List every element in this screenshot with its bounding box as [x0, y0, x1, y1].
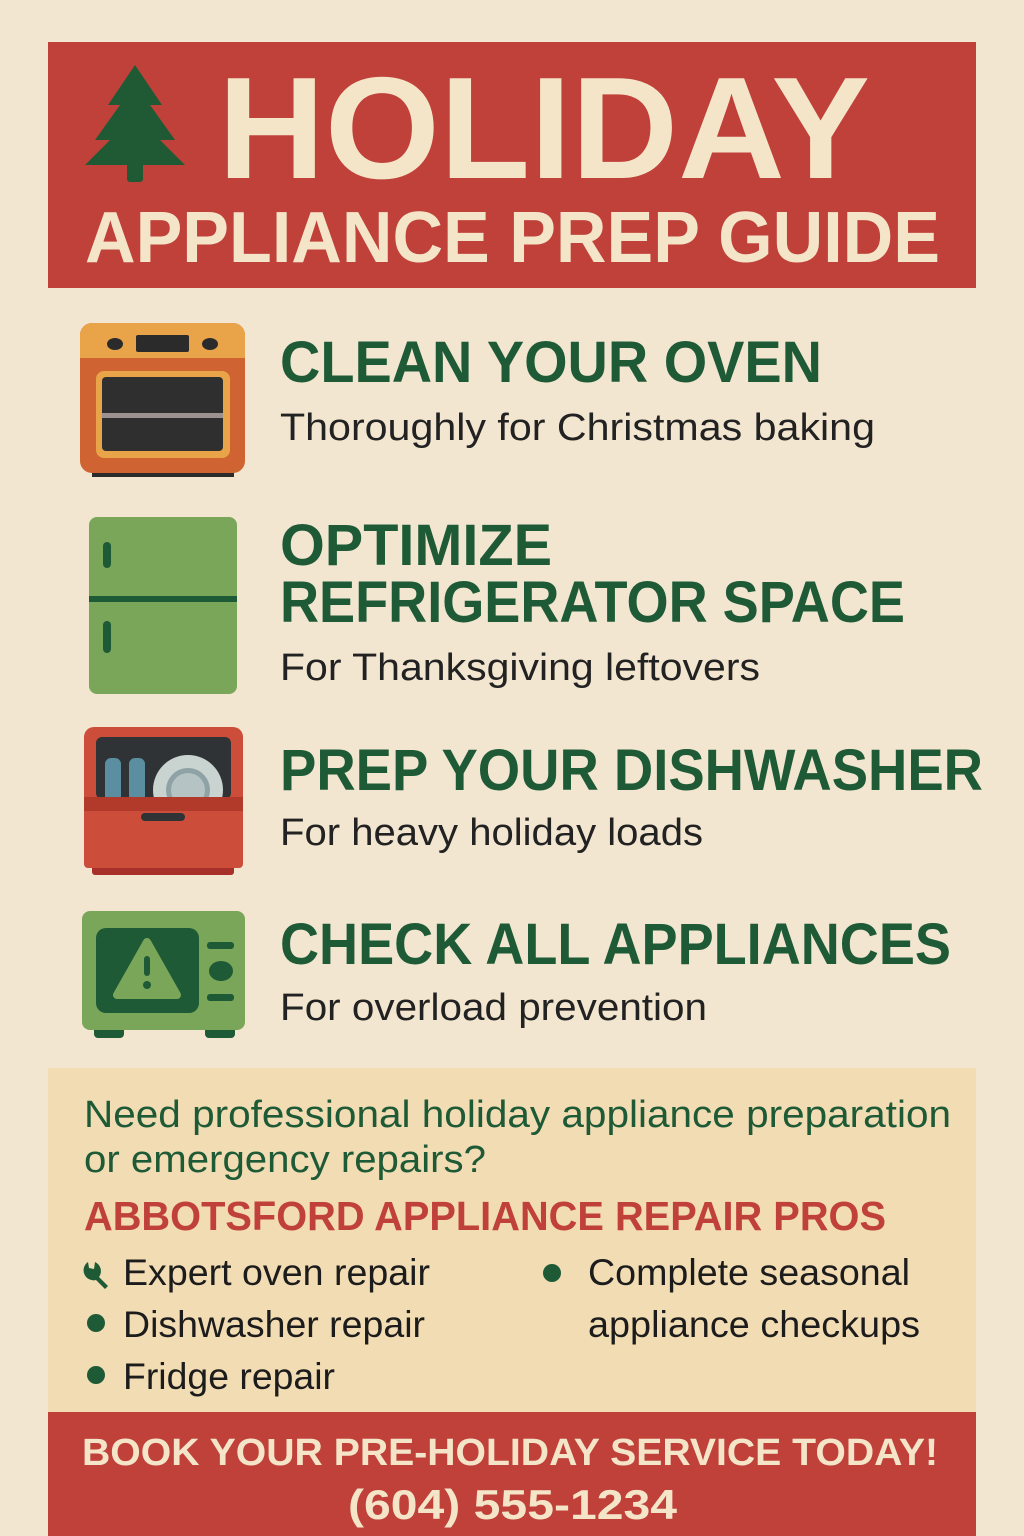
item: check appliances	[82, 911, 951, 1038]
panel: service promo	[48, 1068, 976, 1412]
item: dishwasher	[84, 727, 983, 875]
description: For heavy holiday loads	[280, 812, 703, 854]
subtitle: APPLIANCE PREP GUIDE	[85, 198, 940, 278]
icon: dishwasher	[84, 727, 243, 875]
panel: service promo: or emergency repairs?	[84, 1139, 486, 1181]
header banner	[48, 42, 976, 288]
company name: ABBOTSFORD APPLIANCE REPAIR PROS	[84, 1193, 886, 1239]
footer: call to action: BOOK YOUR PRE-HOLIDAY SERVICE TODAY!	[82, 1432, 938, 1474]
heading: CLEAN YOUR OVEN	[280, 330, 822, 395]
heading: CHECK ALL APPLIANCES	[280, 912, 951, 977]
heading: PREP YOUR DISHWASHER	[280, 738, 983, 803]
description: Thoroughly for Christmas baking	[280, 407, 875, 449]
services list	[84, 1252, 920, 1397]
icon: wrench	[84, 1262, 108, 1289]
item: clean oven	[80, 323, 875, 477]
footer: call to action	[48, 1412, 976, 1536]
description: For overload prevention	[280, 987, 707, 1029]
title: HOLIDAY	[218, 47, 870, 209]
services list: Expert oven repair	[123, 1252, 430, 1293]
icon: microwave warning	[82, 911, 245, 1038]
icon: christmas tree	[85, 65, 185, 182]
icon: fridge	[89, 517, 237, 694]
heading: OPTIMIZE	[280, 513, 552, 578]
services list: Complete seasonal	[588, 1252, 910, 1293]
icon: oven	[80, 323, 245, 477]
question text: Need professional holiday appliance preparation	[84, 1094, 951, 1136]
services list: Fridge repair	[123, 1356, 335, 1397]
phone number: (604) 555-1234	[348, 1481, 678, 1528]
services list: Dishwasher repair	[123, 1304, 425, 1345]
item: fridge: REFRIGERATOR SPACE	[280, 570, 905, 635]
services list: appliance checkups	[588, 1304, 920, 1345]
description: For Thanksgiving leftovers	[280, 647, 760, 689]
item: fridge	[89, 513, 905, 694]
